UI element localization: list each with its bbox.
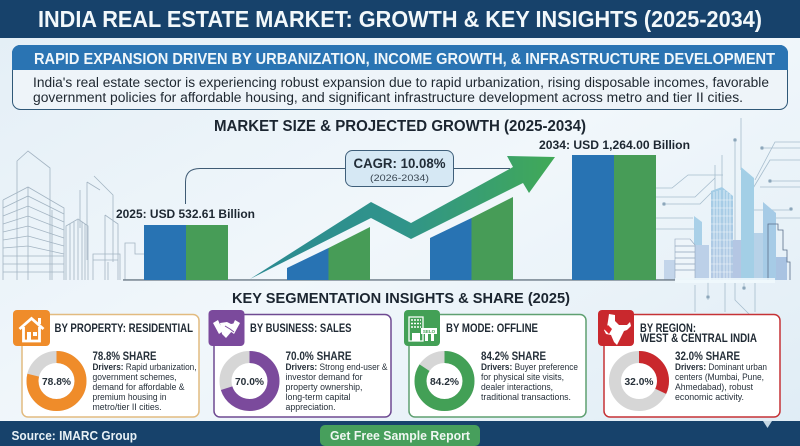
business heading: BY BUSINESS: SALES (250, 323, 352, 335)
header bar (0, 0, 800, 38)
label: 2034 value: 2034: USD 1,264.00 Billion (539, 138, 690, 152)
region share text: Ahmedabad), robust (675, 382, 753, 392)
mode share text (481, 351, 578, 402)
icon: house (13, 310, 50, 346)
business share text: Drivers: Strong end-user & (286, 362, 388, 372)
property share text: demand for affordable & (92, 382, 184, 392)
donut: 70.0%: 70.0% (235, 376, 265, 388)
callout: CAGR (346, 150, 454, 186)
summary text (33, 75, 769, 105)
property share text: government schemes, (92, 372, 176, 382)
panel: summary (12, 45, 788, 110)
mode heading: BY MODE: OFFLINE (446, 323, 538, 335)
property share text: premium housing in (92, 392, 166, 402)
bar: 2025 (144, 225, 228, 280)
business share text: 70.0% SHARE (286, 351, 352, 363)
icon: office building (404, 310, 440, 346)
mode share text: Drivers: Buyer preference (481, 362, 578, 372)
donut: 32.0% (615, 357, 663, 405)
mode share text: for physical site visits, (481, 372, 564, 382)
panel: business (208, 310, 391, 417)
region heading: WEST & CENTRAL INDIA (640, 333, 757, 345)
source text: Source: IMARC Group (12, 429, 137, 443)
callout: CAGR: (2026-2034) (370, 173, 429, 183)
property heading: BY PROPERTY: RESIDENTIAL (54, 323, 193, 335)
donut: 32.0%: 32.0% (624, 376, 654, 388)
summary text: India's real estate sector is experiencing robust expansion due to rapid urbanization, rising disposable incomes, favorable (33, 75, 769, 90)
donut: 78.8% (32, 357, 80, 405)
connector line to CAGR (186, 168, 510, 204)
panel: region (598, 310, 780, 417)
mode share text: traditional transactions. (481, 392, 571, 402)
property share text: Drivers: Rapid urbanization, (92, 362, 196, 372)
title: INDIA REAL ESTATE MARKET: GROWTH & KEY INSIGHTS (2025-2034) (38, 6, 762, 32)
region share text: Drivers: Dominant urban (675, 362, 767, 372)
market heading: MARKET SIZE & PROJECTED GROWTH (2025-2034) (214, 118, 586, 135)
mode share text: dealer interactions, (481, 382, 553, 392)
label: 2025 value: 2025: USD 532.61 Billion (116, 207, 255, 221)
growth arrow (250, 156, 555, 279)
business share text: property ownership, (286, 382, 362, 392)
footer bar (0, 421, 800, 446)
segmentation heading: KEY SEGMENTATION INSIGHTS & SHARE (2025) (232, 290, 570, 307)
summary text: government policies for affordable housing, and significant infrastructure development across metro and tier II cities. (33, 90, 743, 105)
button: sample report: Get Free Sample Report (330, 429, 471, 443)
donut: 78.8%: 78.8% (42, 376, 72, 388)
business share text: long-term capital (286, 392, 350, 402)
panel: property (13, 310, 199, 417)
bar: intermediate year 1 (287, 227, 370, 280)
region share text: 32.0% SHARE (675, 351, 740, 363)
region share text (675, 351, 767, 402)
region heading: BY REGION: (640, 323, 696, 335)
callout: CAGR: CAGR: 10.08% (354, 156, 446, 171)
business share text: investor demand for (286, 372, 362, 382)
button: sample report (320, 425, 480, 446)
region share text: centers (Mumbai, Pune, (675, 372, 764, 382)
business share text: appreciation. (286, 402, 336, 412)
right circuit lines (656, 118, 800, 315)
mode share text: 84.2% SHARE (481, 351, 546, 363)
donut: 84.2%: 84.2% (430, 376, 460, 388)
bar: intermediate year 2 (430, 197, 513, 280)
bar: 2034 (572, 155, 656, 280)
icon: office building: SELO (423, 329, 436, 334)
property share text (92, 351, 196, 412)
icon: handshake (208, 310, 244, 346)
property share text: 78.8% SHARE (92, 351, 157, 363)
chart baseline (123, 279, 675, 281)
region share text: economic activity. (675, 392, 744, 402)
business share text (286, 351, 388, 412)
right blue skyline (664, 167, 790, 283)
donut: 84.2% (420, 357, 468, 405)
region heading (640, 323, 757, 345)
icon: India map (598, 310, 634, 346)
property share text: metro/tier II cities. (92, 402, 162, 412)
panel: mode (404, 310, 586, 417)
left wireframe skyline (3, 151, 144, 280)
donut: 70.0% (226, 357, 274, 405)
